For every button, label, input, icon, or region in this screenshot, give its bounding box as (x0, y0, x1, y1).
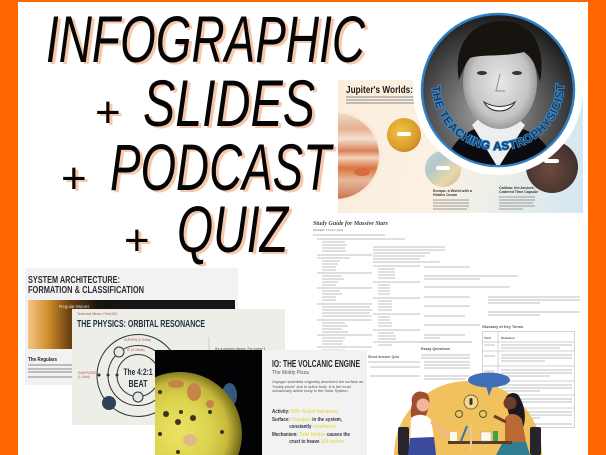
person: right host (494, 393, 530, 455)
text: Callisto caption: Callisto: the Ancient, Cratered Time Capsule (499, 186, 538, 194)
list: key facts: Surface: Youngest in the system, (272, 417, 342, 423)
title shadow (49, 4, 369, 268)
moon: Io (387, 118, 421, 152)
heading: Jupiter's Worlds: Jupiter's Worlds: (346, 84, 413, 96)
text: the 4:2:1 beat: The 4:2:1 (124, 367, 153, 378)
text: answer notes (488, 297, 580, 315)
list: key facts: crust to heave 100 meters (289, 439, 344, 445)
title letters: + (61, 154, 87, 203)
yellow backdrop (394, 381, 542, 455)
labels (78, 338, 151, 379)
text: Europa body (433, 200, 469, 210)
rule (420, 341, 472, 343)
label: Europa tag (436, 166, 450, 170)
list: key facts: constantly resurfaced (289, 424, 336, 430)
slide headings (272, 358, 360, 376)
title letters: QUIZ (177, 192, 290, 266)
subhead: The Moldy Pizza (272, 370, 309, 376)
text: Europa caption: Europa: a World with a Hidden Ocean (433, 189, 472, 197)
text: Callisto body (499, 196, 535, 210)
moon: Callisto (526, 141, 578, 193)
speech bubble (468, 372, 510, 396)
moon: Europa (425, 151, 461, 187)
list: key facts (272, 409, 350, 445)
orbit rings (97, 334, 179, 416)
panel: slide, Io volcanic engine (155, 350, 367, 455)
heading: short answer: Short Answer Quiz (368, 355, 399, 359)
person: left host (408, 391, 450, 455)
heading: system architecture: FORMATION & CLASSIFICATION (28, 285, 144, 296)
table: glossary of key terms: Term (484, 336, 491, 340)
title shadow: QUIZ (180, 194, 293, 268)
text: the 4:2:1 beat: BEAT (128, 379, 148, 390)
image: dark ring diagram (28, 300, 235, 349)
text: quiz column one (313, 235, 405, 353)
title shadow: + (98, 90, 124, 139)
list: key facts: Mechanism: Tidal friction causes the (272, 432, 350, 438)
heading: essay questions: Essay Questions (421, 347, 450, 351)
image: Io photo (155, 350, 262, 455)
volcanic spots (158, 380, 224, 454)
Great Red Spot (354, 168, 370, 176)
curved label: THE TEACHING ASTROPHYSICIST (431, 82, 565, 151)
title shadow: + (64, 156, 90, 205)
table items (450, 423, 498, 451)
labels: GANYMEDE (78, 371, 96, 375)
labels: EUROPA (2 Orbits) (124, 338, 151, 342)
text: short answer lines (368, 362, 420, 376)
illustration: podcast hosts (394, 372, 542, 455)
title: infographic + slides + podcast + quiz (46, 2, 369, 268)
panel: slide, orbital resonance (72, 309, 285, 425)
panel: Jupiter's Worlds poster (338, 80, 583, 213)
title letters: SLIDES (143, 66, 315, 140)
text: essay lines (421, 355, 470, 379)
table: glossary of key terms (482, 325, 575, 428)
heading: the physics: THE PHYSICS: ORBITAL RESONANCE (77, 318, 205, 330)
intro text (346, 96, 414, 104)
moon: Io globe (155, 372, 242, 455)
heading: the regulars: The Regulars (28, 357, 57, 363)
labels and headings (28, 275, 144, 378)
moon: lower (133, 392, 143, 402)
title letters: + (124, 216, 150, 265)
body text: Voyager scientists originally described the surface as "moldy pizza" due to sulfur frost. It is the most volcanically active body in the Solar System. (272, 379, 363, 393)
heading: system architecture (28, 275, 144, 296)
portrait (452, 21, 547, 165)
microphone icon (464, 395, 478, 409)
text: quiz column two (373, 247, 445, 345)
table: glossary of key terms: Definition (501, 336, 515, 340)
label: Callisto tag (544, 159, 559, 163)
title shadow: SLIDES (146, 68, 318, 142)
plume (222, 383, 237, 407)
label: moon tag (397, 132, 411, 136)
chairs (398, 427, 541, 455)
table (448, 441, 512, 444)
chart: orbital rings (77, 312, 266, 417)
panel: study guide document (312, 220, 580, 428)
title shadow: + (127, 218, 153, 267)
moon: Ganymede (102, 396, 116, 410)
title letters: + (95, 88, 121, 137)
planet: Jupiter (291, 113, 379, 199)
title letters (46, 2, 366, 266)
labels: (1 Orbit) (78, 375, 90, 379)
panel: slide, system architecture (25, 268, 238, 385)
subheading: multiple choice: Multiple Choice Quiz (312, 228, 344, 232)
text: the 4:2:1 beat (124, 367, 153, 390)
badge: The Teaching Astrophysicist portrait (413, 12, 583, 175)
callout frame (208, 337, 210, 379)
heading: study guide: Study Guide for Massive Stars (313, 221, 389, 227)
kicker: Technical Memo: Field 002 (77, 312, 117, 316)
table: glossary of key terms: Glossary of Key Terms (482, 325, 523, 329)
text: regulars body (28, 365, 76, 377)
text: quiz column three (424, 267, 518, 338)
moon: upper (114, 347, 124, 357)
callout text: It's a cosmic dance. For every 1 (215, 347, 266, 351)
labels: IO (4 Orbits) (127, 348, 145, 352)
list: key facts: Activity: 400+ Active Volcanoes (272, 409, 339, 415)
label: regular moons: Regular Moons (59, 304, 90, 309)
reaction icons (456, 410, 486, 418)
heading: system architecture: SYSTEM ARCHITECTURE: (28, 275, 120, 286)
